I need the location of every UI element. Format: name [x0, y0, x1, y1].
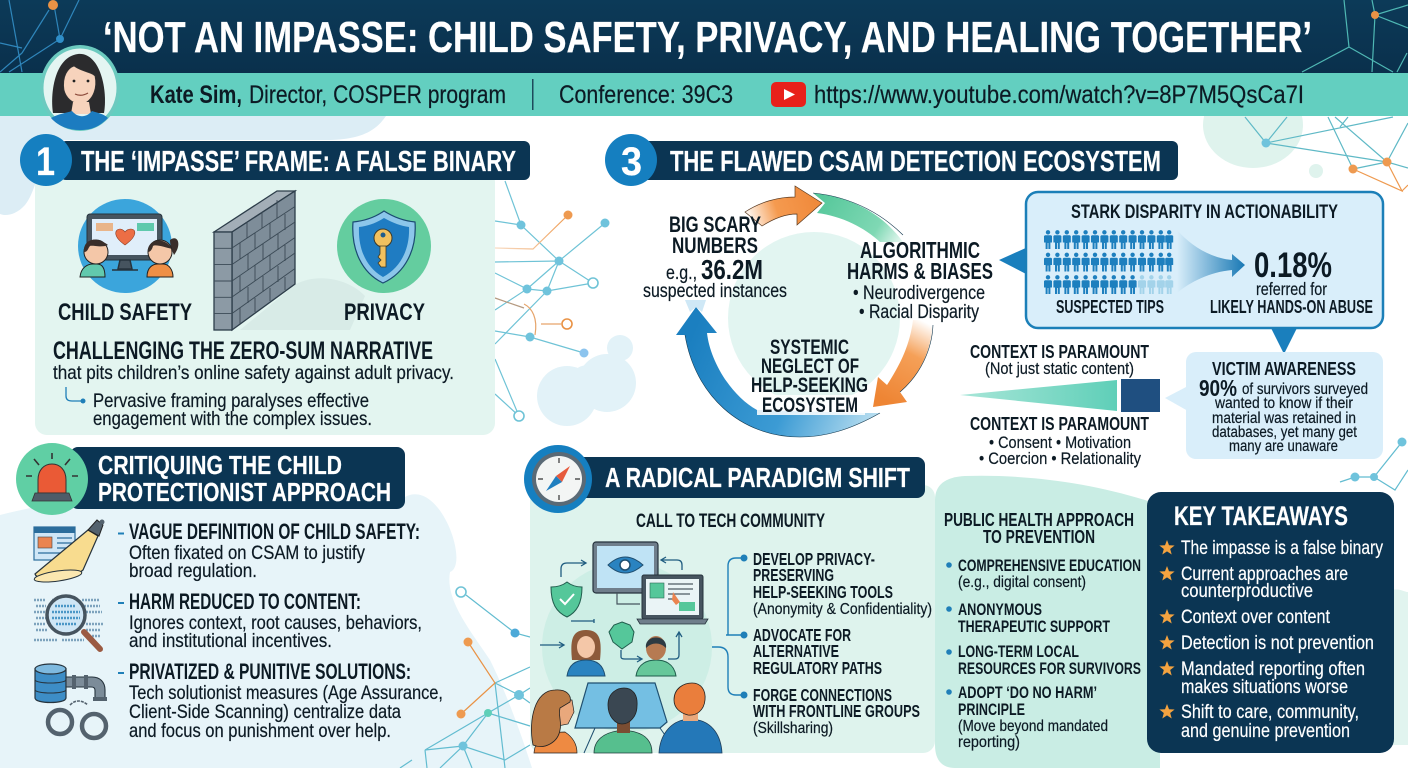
item: education: (e.g., digital consent): [958, 574, 1086, 591]
panel: context is paramount: [960, 342, 1160, 468]
shield check: [551, 582, 582, 617]
speaker name: [150, 81, 506, 109]
item: do no harm: [946, 683, 1108, 751]
panel: context is paramount: CONTEXT IS PARAMOUNT: [970, 342, 1149, 362]
person: woman: [567, 630, 605, 676]
item: therapeutic support: THERAPEUTIC SUPPORT: [958, 617, 1110, 636]
arrow: harms to neglect: [813, 193, 903, 242]
takeaway 2: [1159, 564, 1348, 602]
speaker name: Director, COSPER program: [249, 81, 506, 109]
section 4 heading: A RADICAL PARADIGM SHIFT: [605, 462, 910, 493]
takeaway 3: Context over content: [1181, 607, 1331, 628]
systemic neglect: NEGLECT OF: [761, 355, 859, 378]
panel: flawed csam detection ecosystem: [605, 134, 1383, 468]
action: regulatory paths: [753, 625, 882, 678]
action: frontline groups: (Skillsharing): [753, 720, 833, 737]
item: harm reduced to content: Ignores context, root causes, behaviors,: [129, 612, 422, 634]
section 1 heading: 1: [36, 140, 55, 184]
connector arrow: [66, 387, 86, 404]
action: privacy-preserving tools: DEVELOP PRIVACY-: [753, 549, 875, 569]
section 3 heading: 3: [621, 140, 642, 184]
paralysis note: Pervasive framing paralyses effective: [93, 390, 369, 412]
person: audience right: [659, 683, 722, 753]
stat caption: referred for: [1256, 279, 1327, 299]
section 4 heading: [575, 457, 925, 498]
takeaway 6: [1159, 702, 1359, 742]
section 2 heading: [70, 447, 405, 509]
item: education: COMPREHENSIVE EDUCATION: [958, 556, 1141, 575]
item: vague definition: broad regulation.: [129, 560, 257, 582]
item: privatized and punitive solutions: Tech solutionist measures (Age Assurance,: [129, 682, 443, 704]
item: privatized and punitive solutions: PRIVATIZED & PUNITIVE SOLUTIONS:: [129, 659, 411, 684]
takeaway 6: and genuine prevention: [1181, 721, 1350, 742]
big scary numbers: BIG SCARY: [669, 212, 761, 237]
section 3 heading: THE FLAWED CSAM DETECTION ECOSYSTEM: [670, 146, 1161, 178]
section 3 heading: [605, 134, 1178, 186]
paralysis note: [93, 390, 372, 430]
laptop: [637, 575, 708, 624]
table screen: [575, 683, 672, 753]
label: suspected tips: SUSPECTED TIPS: [1056, 297, 1164, 317]
takeaway 2: Current approaches are: [1181, 564, 1348, 585]
zero-sum narrative text: CHALLENGING THE ZERO-SUM NARRATIVE: [53, 337, 433, 365]
conference: Conference: 39C3: [559, 81, 733, 109]
action: frontline groups: WITH FRONTLINE GROUPS: [753, 701, 920, 721]
sub-heading: call to tech community: CALL TO TECH COMMUNITY: [636, 511, 825, 532]
systemic neglect: SYSTEMIC: [770, 336, 849, 359]
zero-sum narrative text: [53, 337, 454, 384]
systemic neglect: [751, 336, 868, 417]
icon: youtube: [771, 82, 806, 107]
zero-sum narrative text: that pits children’s online safety against adult privacy.: [53, 362, 454, 384]
big scary numbers: [643, 212, 787, 302]
icon: siren: [16, 443, 88, 515]
big scary numbers: NUMBERS: [672, 233, 758, 258]
item: harm reduced to content: and institutional incentives.: [129, 630, 332, 652]
item: privatized and punitive solutions: [35, 659, 443, 742]
video url: https://www.youtube.com/watch?v=8P7M5QsCa7I: [814, 81, 1304, 109]
awareness body text: databases, yet many get: [1212, 424, 1358, 441]
callout heading: STARK DISPARITY IN ACTIONABILITY: [1071, 202, 1338, 223]
panel: critiquing the child protectionist approach: [16, 443, 443, 742]
item: local resources: [946, 642, 1141, 678]
speaker and source bar: [0, 73, 1408, 116]
action: regulatory paths: REGULATORY PATHS: [753, 658, 882, 678]
item: vague definition: VAGUE DEFINITION OF CHILD SAFETY:: [129, 519, 420, 544]
item: therapeutic support: [946, 600, 1110, 636]
person: man: [636, 636, 676, 676]
header banner: [0, 0, 1408, 73]
takeaway 6: Shift to care, community,: [1181, 702, 1359, 723]
item: do no harm: ADOPT ‘DO NO HARM’: [958, 683, 1097, 702]
paralysis note: engagement with the complex issues.: [93, 408, 372, 430]
item: harm reduced to content: HARM REDUCED TO CONTENT:: [129, 589, 361, 614]
person: audience center: [594, 688, 652, 753]
icon: magnifier over data: [34, 596, 103, 649]
wedge graphic: [960, 379, 1160, 412]
icon: spotlight on browser: [34, 520, 104, 584]
public health heading: [944, 509, 1134, 547]
section 1 heading: THE ‘IMPASSE’ FRAME: A FALSE BINARY: [81, 146, 516, 178]
section 2 heading: PROTECTIONIST APPROACH: [98, 477, 391, 507]
takeaway 5: makes situations worse: [1181, 677, 1348, 698]
panel: public health approach: [935, 476, 1160, 768]
item: privatized and punitive solutions: Client-Side Scanning) centralize data: [129, 701, 401, 723]
item: vague definition: [34, 519, 420, 584]
action: privacy-preserving tools: HELP-SEEKING TOOLS: [753, 582, 893, 602]
panel: a radical paradigm shift: [524, 445, 935, 753]
takeaway 2: counterproductive: [1181, 581, 1313, 602]
panel: context is paramount: CONTEXT IS PARAMOUNT: [970, 414, 1149, 434]
algorithmic harms: • Racial Disparity: [859, 302, 979, 323]
big scary numbers: 36.2M: [701, 254, 763, 285]
arrow: numbers to harms: [745, 186, 822, 226]
awareness body text: many are unaware: [1229, 438, 1338, 455]
public health heading: TO PREVENTION: [983, 526, 1095, 547]
icon: child safety: [78, 199, 178, 293]
action: regulatory paths: ALTERNATIVE: [753, 641, 839, 661]
label: privacy: PRIVACY: [344, 299, 425, 326]
takeaway 4: Detection is not prevention: [1181, 633, 1374, 654]
small gear shield: [609, 622, 634, 649]
systemic neglect: ECOSYSTEM: [762, 394, 858, 417]
arrow: funnel to 0.18 percent: [1177, 230, 1245, 293]
item: privatized and punitive solutions: and focus on punishment over help.: [129, 720, 391, 742]
item: do no harm: (Move beyond mandated: [958, 718, 1108, 735]
algorithmic harms: ALGORITHMIC: [860, 237, 980, 263]
algorithmic harms: HARMS & BIASES: [847, 258, 993, 284]
awareness body text: wanted to know if their: [1214, 395, 1353, 412]
pictogram: suspected tips: [1044, 230, 1173, 294]
stat caption: [1210, 279, 1373, 317]
action: regulatory paths: ADVOCATE FOR: [753, 625, 851, 645]
item: harm reduced to content: [34, 589, 422, 652]
icon: compass: [524, 445, 592, 513]
big scary numbers: suspected instances: [643, 281, 787, 302]
item: do no harm: PRINCIPLE: [958, 700, 1025, 719]
bracket connector: [712, 555, 747, 698]
section 2 heading: CRITIQUING THE CHILD: [98, 450, 342, 480]
panel: context is paramount: (Not just static content): [985, 360, 1134, 378]
speaker name: Kate Sim,: [150, 81, 242, 109]
takeaways heading: KEY TAKEAWAYS: [1174, 501, 1348, 531]
illustration: tech community: [531, 542, 722, 753]
algorithmic harms: • Neurodivergence: [853, 283, 985, 304]
big scary numbers: e.g.,: [666, 263, 697, 284]
arrow: back to numbers: [676, 307, 880, 437]
systemic neglect: HELP-SEEKING: [751, 374, 868, 397]
label: child safety: CHILD SAFETY: [58, 299, 192, 326]
icon: speaker portrait: [40, 45, 120, 131]
icon: privacy shield: [337, 199, 431, 293]
action: frontline groups: FORGE CONNECTIONS: [753, 685, 892, 705]
callout: stark disparity: [999, 192, 1383, 354]
icon: database pipe handcuffs: [35, 664, 107, 738]
icon: brick wall: [214, 191, 365, 330]
takeaway 5: Mandated reporting often: [1181, 659, 1365, 680]
person: audience left: [531, 690, 577, 753]
public health heading: PUBLIC HEALTH APPROACH: [944, 509, 1134, 530]
takeaway 5: [1159, 659, 1365, 698]
awareness body text: of survivors surveyed: [1242, 381, 1368, 398]
action: privacy-preserving tools: PRESERVING: [753, 565, 834, 585]
monitor with eye: [593, 542, 658, 604]
item: education: [946, 556, 1141, 591]
awareness body text: material was retained in: [1212, 410, 1356, 427]
action: frontline groups: [753, 685, 920, 737]
cycle diagram: [643, 186, 993, 437]
item: local resources: LONG-TERM LOCAL: [958, 642, 1079, 661]
callout: victim awareness: [1165, 352, 1383, 459]
stat: 90 percent: 90%: [1199, 375, 1237, 401]
action: privacy-preserving tools: [753, 549, 932, 618]
item: do no harm: reporting): [958, 734, 1020, 751]
action: privacy-preserving tools: (Anonymity & Confidentiality): [753, 601, 932, 618]
stat: 0.18 percent: 0.18%: [1254, 246, 1332, 285]
awareness body text: [1212, 381, 1368, 455]
item: therapeutic support: ANONYMOUS: [958, 600, 1042, 619]
item: vague definition: Often fixated on CSAM to justify: [129, 542, 365, 564]
panel: context is paramount: • Consent • Motivation: [989, 434, 1131, 452]
item: local resources: RESOURCES FOR SURVIVORS: [958, 659, 1141, 678]
callout: victim awareness: VICTIM AWARENESS: [1212, 358, 1356, 379]
algorithmic harms: [847, 237, 993, 323]
panel: context is paramount: • Coercion • Relationality: [979, 450, 1142, 468]
arrow: neglect loop: [873, 320, 933, 407]
section 1 heading: [20, 134, 530, 186]
panel: the impasse frame: [20, 134, 530, 435]
panel: key takeaways: [1147, 492, 1394, 753]
